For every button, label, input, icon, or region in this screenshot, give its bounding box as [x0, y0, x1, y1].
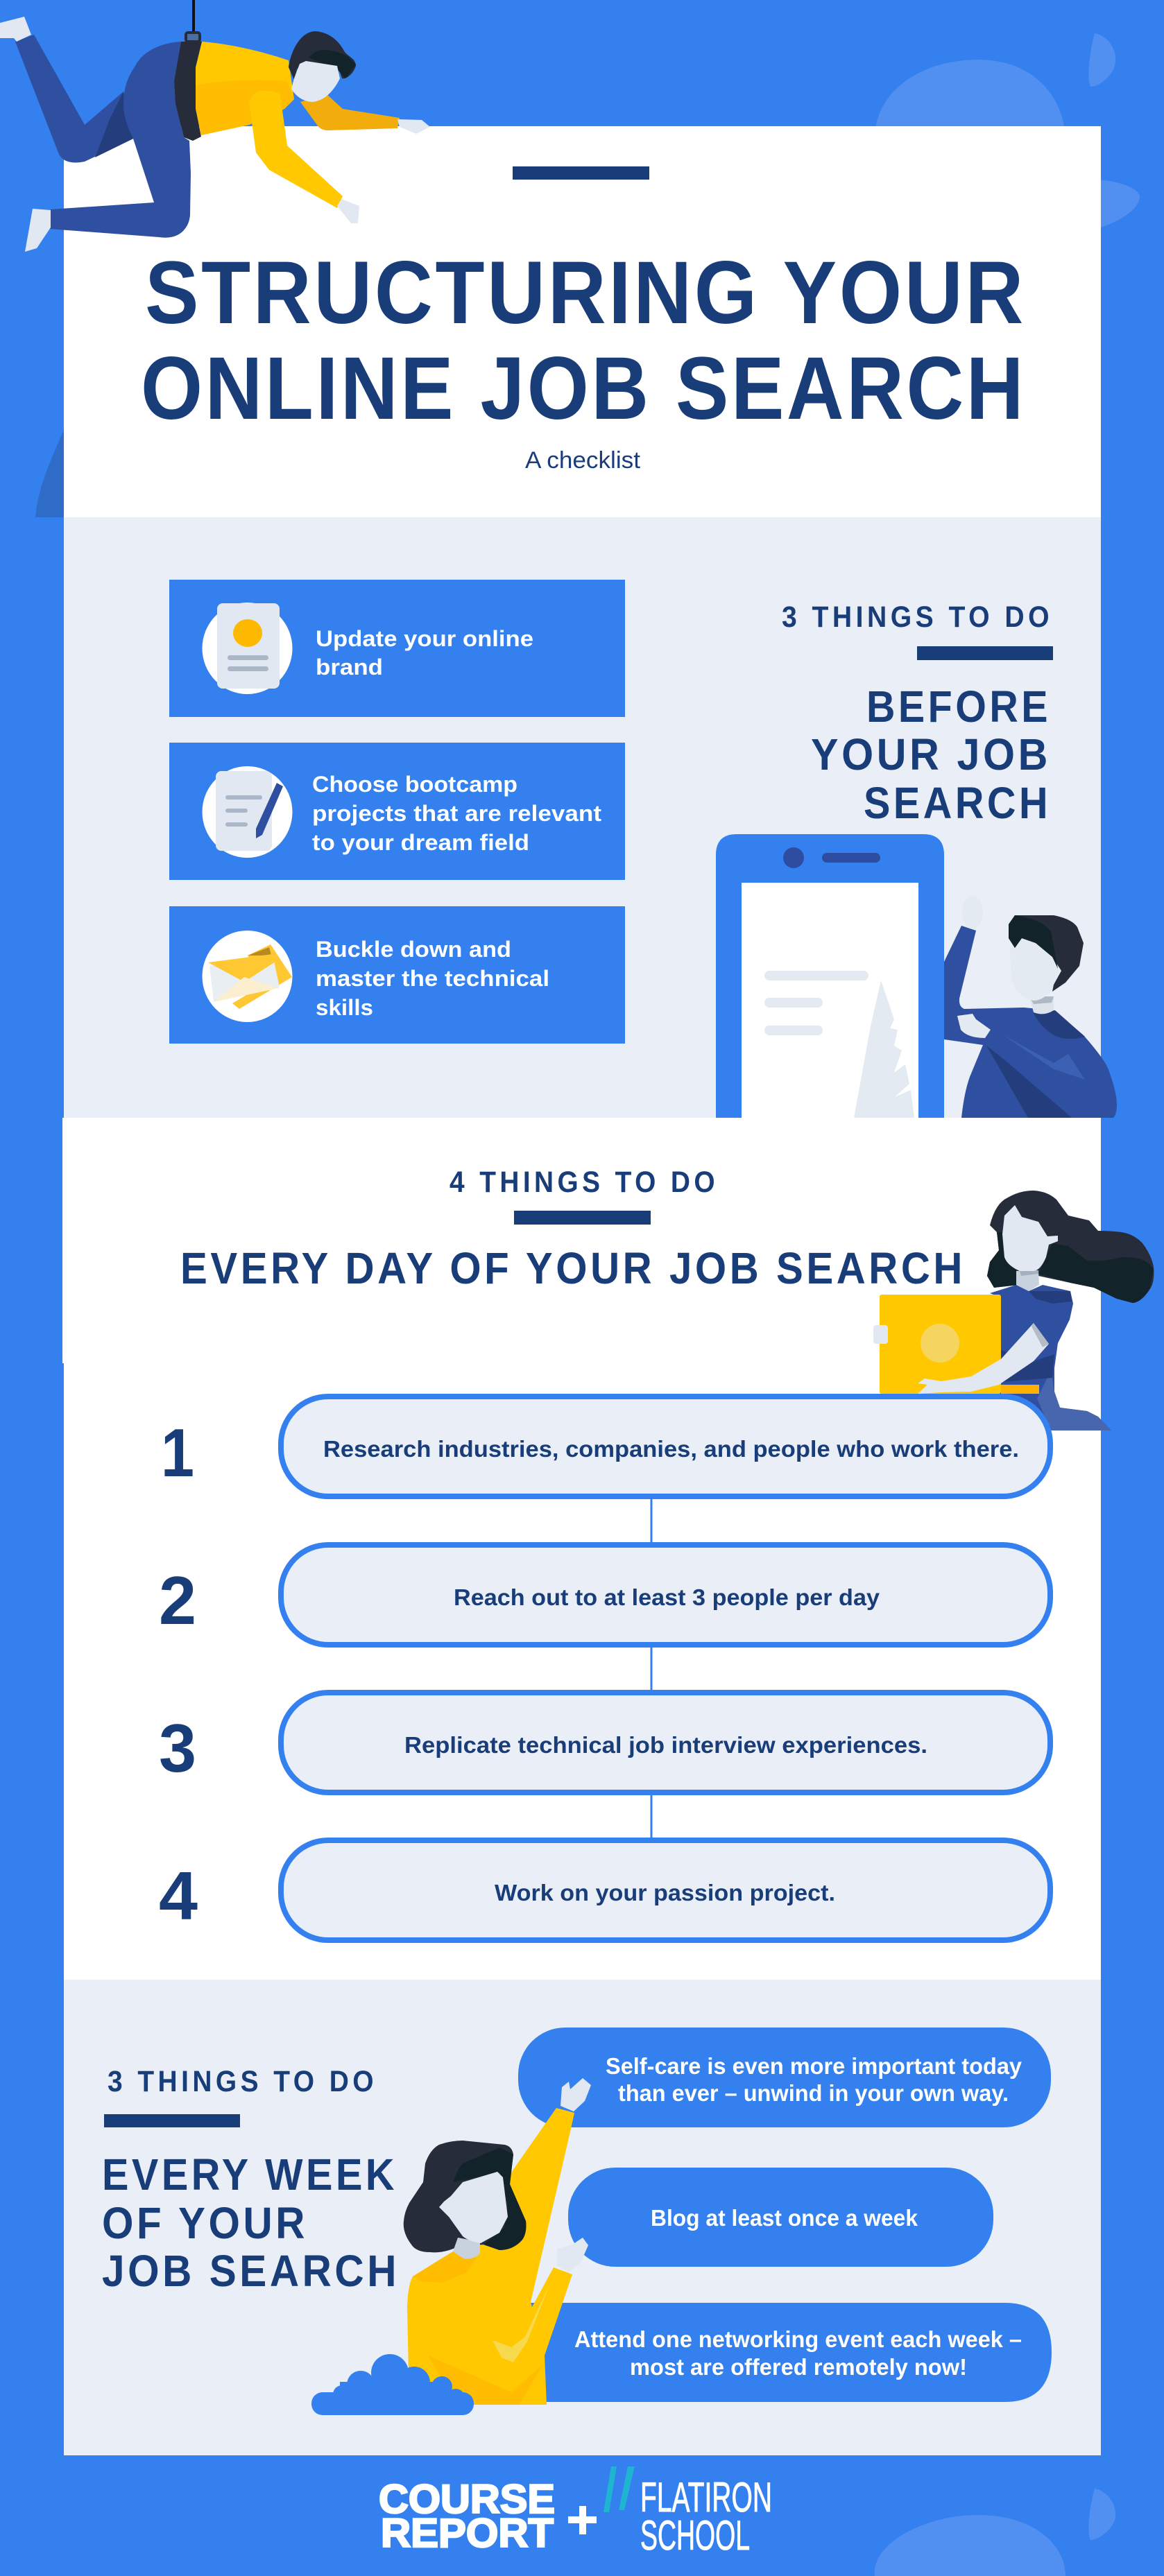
card text: [312, 772, 601, 855]
title heading: ONLINE JOB SEARCH: [141, 339, 1026, 438]
illustration: man hanging from rope: [0, 0, 430, 252]
title heading: [141, 243, 1026, 438]
step 4: [159, 1840, 1050, 1940]
panel: before your job search: [64, 517, 1101, 1118]
card: buckle down: [169, 906, 625, 1044]
illustration: woman reaching up: [404, 2078, 591, 2405]
card text: Buckle down and: [316, 937, 511, 962]
step 1: [161, 1397, 1050, 1496]
callout: networking: [531, 2303, 1052, 2402]
heading: 3 things to do weekly: [102, 2065, 400, 2296]
logo: Course Report: COURSE: [379, 2477, 555, 2522]
icon: profile document: [217, 603, 280, 689]
callout: blog: [568, 2168, 993, 2267]
logo: Course Report: [379, 2477, 555, 2556]
logo: Course Report: REPORT: [381, 2511, 554, 2556]
illustration: man waving: [944, 896, 1117, 1118]
step 2: Reach out to at least 3 people per day: [454, 1584, 880, 1610]
logo: Flatiron School: FLATIRON: [640, 2474, 772, 2521]
card text: [316, 626, 533, 680]
step 4: Work on your passion project.: [495, 1880, 835, 1905]
heading: 4 things to do: 4 THINGS TO DO: [450, 1166, 719, 1199]
heading: 4 things to do: EVERY DAY OF YOUR JOB SEARCH: [180, 1243, 966, 1293]
card text: Choose bootcamp: [312, 772, 517, 797]
card text: [316, 937, 549, 1020]
logo: Flatiron School: SCHOOL: [640, 2512, 750, 2559]
step 2: 2: [159, 1562, 196, 1639]
heading: 3 things to do weekly: 3 THINGS TO DO: [108, 2065, 377, 2098]
title heading: STRUCTURING YOUR: [145, 243, 1026, 343]
step 3: [159, 1693, 1050, 1792]
illustration: woman with folder: [873, 1191, 1154, 1430]
card: choose bootcamp projects: [169, 743, 625, 880]
icon: cloud: [311, 2354, 474, 2415]
checklist: numbered steps: [159, 1397, 1050, 1940]
panel: every week of your job search: [64, 1980, 1101, 2455]
callout: networking: Attend one networking event each week –: [574, 2326, 1022, 2352]
heading: 3 things to do before: 3 THINGS TO DO: [782, 600, 1053, 634]
step 2: [159, 1545, 1050, 1645]
heading: 3 things to do before: BEFORE: [866, 682, 1051, 732]
card text: projects that are relevant: [312, 801, 601, 826]
card text: to your dream field: [312, 830, 529, 855]
title accent bar: [513, 166, 649, 180]
card text: brand: [316, 655, 383, 680]
subtitle: A checklist: [525, 447, 641, 474]
heading: 3 things to do weekly: EVERY WEEK: [102, 2150, 397, 2199]
logo: Flatiron School: [604, 2466, 772, 2559]
step 1: Research industries, companies, and people who work there.: [323, 1436, 1019, 1462]
card text: master the technical: [316, 966, 549, 991]
card text: Update your online: [316, 626, 533, 651]
heading: 3 things to do before: [782, 600, 1053, 828]
illustration: phone: [716, 834, 944, 1118]
step 3: 3: [159, 1710, 196, 1786]
step 1: 1: [161, 1415, 194, 1491]
panel: every day of your job search: [62, 1118, 1101, 1980]
panel: title: [64, 126, 1101, 518]
heading: 3 things to do before: SEARCH: [864, 778, 1051, 828]
step 4: 4: [159, 1858, 198, 1934]
icon: plus sign: [568, 2506, 597, 2534]
heading: 4 things to do: [180, 1166, 966, 1293]
icon: envelopes: [208, 944, 292, 1009]
heading: 3 things to do before: YOUR JOB: [811, 729, 1051, 779]
callout: self-care: Self-care is even more important today: [606, 2053, 1022, 2079]
callout: networking: most are offered remotely now!: [630, 2354, 967, 2380]
icon: document and pencil: [216, 771, 283, 851]
callout: self-care: [518, 2028, 1051, 2127]
step 3: Replicate technical job interview experiences.: [404, 1732, 927, 1758]
card text: skills: [316, 995, 373, 1020]
heading: 3 things to do weekly: OF YOUR: [102, 2198, 308, 2248]
callout: blog: Blog at least once a week: [651, 2205, 918, 2231]
callout: self-care: than ever – unwind in your own way.: [618, 2080, 1009, 2106]
card: update your online brand: [169, 580, 625, 717]
heading: 3 things to do weekly: JOB SEARCH: [102, 2246, 400, 2296]
connector lines: [651, 1498, 652, 1840]
